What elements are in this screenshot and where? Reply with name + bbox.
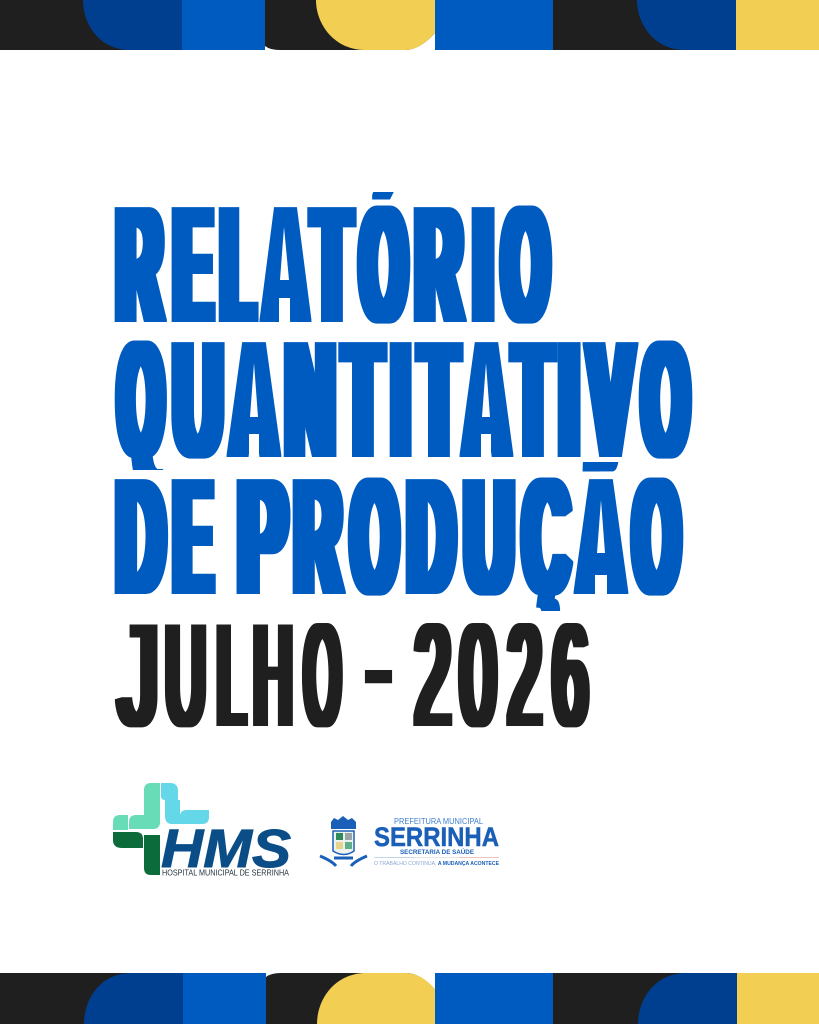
logo caption: HOSPITAL MUNICIPAL DE SERRINHA <box>162 868 289 878</box>
text: serrinha: SERRINHA <box>374 822 499 852</box>
icon: medical cross <box>113 783 209 875</box>
title line 3: D <box>408 445 454 628</box>
title line 3: Ç <box>524 445 568 628</box>
title line 2: T <box>514 308 552 491</box>
title: relatório quantitativo de produção <box>117 173 688 628</box>
title line 3: Ã <box>578 445 624 628</box>
subtitle: julho 2026: - <box>367 584 390 746</box>
title line 3: U <box>465 445 513 628</box>
subtitle: julho 2026: O <box>305 594 340 756</box>
title line 2: T <box>344 308 382 491</box>
title line 3 <box>114 462 684 611</box>
title line 2: A <box>232 308 276 491</box>
title line 3: R <box>295 445 341 628</box>
title line 1: R <box>416 173 462 356</box>
title line 1 <box>114 192 552 324</box>
title line 2 <box>114 340 692 470</box>
title line 1: T <box>313 173 351 356</box>
title line 3: E <box>174 445 211 628</box>
icon: municipal crest <box>320 816 367 866</box>
text: O <box>634 445 679 628</box>
subtitle: julho 2026: L <box>217 594 245 756</box>
top decorative band <box>0 0 819 50</box>
title: relatório quantitativo de produção: O <box>503 173 548 356</box>
subtitle: julho 2026: 0 <box>460 594 496 756</box>
text: prefeitura municipal: PREFEITURA MUNICIPAL <box>394 817 484 826</box>
title line 3: P <box>238 445 286 628</box>
title line 1: I <box>474 173 493 356</box>
title line 2: U <box>174 308 222 491</box>
title line 1: E <box>174 173 211 356</box>
title line 3: O <box>352 445 397 628</box>
title line 2: N <box>286 308 334 491</box>
subtitle: julho 2026: J <box>119 594 158 756</box>
bottom decorative band <box>0 973 819 1024</box>
text: 6 <box>553 594 588 756</box>
text: secretaria de saúde: SECRETARIA DE SAÚDE <box>400 849 474 856</box>
subtitle: julho 2026: 2 <box>508 594 541 756</box>
logo: hospital municipal de serrinha <box>113 783 291 879</box>
text: O <box>643 308 688 491</box>
title letter A counters <box>246 227 609 596</box>
subtitle: julho 2026: U <box>166 594 206 756</box>
logo wordmark HMS: HMS <box>161 819 291 879</box>
title line 1: Ó <box>361 173 406 356</box>
text: slogan: O TRABALHO CONTINUA, A MUDANÇA ACONTECE <box>374 861 500 867</box>
title line 2: I <box>392 308 409 491</box>
subtitle: julho 2026: 2 <box>415 594 450 756</box>
title line 3: D <box>117 445 164 628</box>
title line 2: V <box>588 308 632 491</box>
title line 1: A <box>264 173 306 356</box>
title line 2: A <box>464 308 508 491</box>
title line 2: T <box>420 308 458 491</box>
subtitle: julho 2026: H <box>254 594 292 756</box>
logo: prefeitura municipal de serrinha <box>320 816 500 867</box>
title line 1: R <box>117 173 162 356</box>
title line 2: Q <box>119 308 163 491</box>
title line 1: L <box>222 173 254 356</box>
title line 2: I <box>560 308 579 491</box>
